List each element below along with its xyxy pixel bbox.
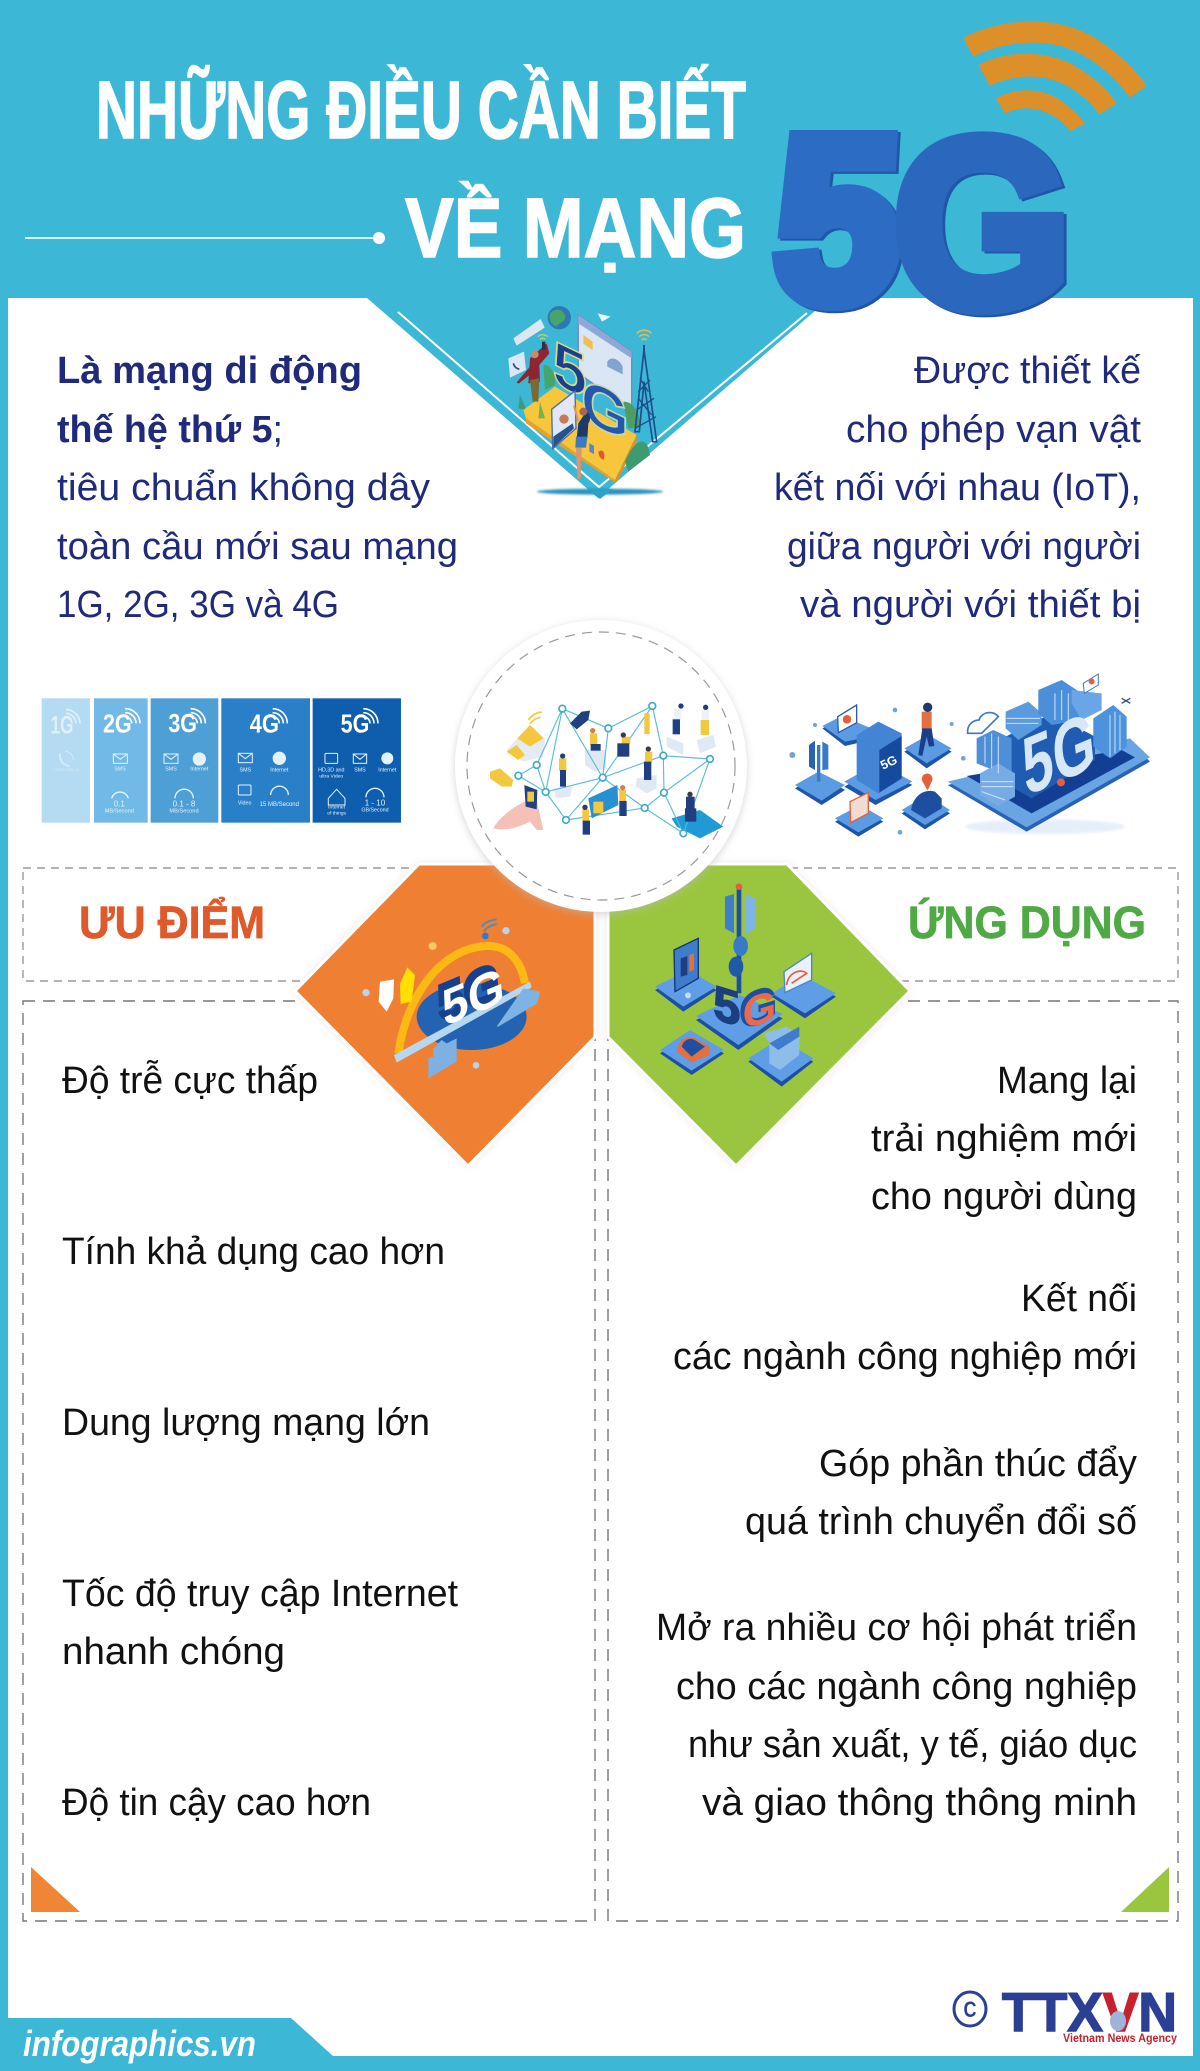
panel: 5G: SMS: [354, 768, 366, 774]
text block: 5G design purpose: giữa người với người: [787, 526, 1141, 568]
panel: orange diamond with 5G icon: [295, 864, 595, 1166]
panel: applications list box: [608, 1001, 1178, 1921]
panel: green diamond with devices icon: [608, 864, 910, 1166]
text block: 5G design purpose: kết nối với nhau (IoT),: [774, 467, 1141, 509]
heading: applications: ỨNG DỤNG: [908, 897, 1146, 948]
text block: applications list: cho người dùng: [871, 1176, 1137, 1218]
text block: applications list: và giao thông thông minh: [702, 1782, 1137, 1824]
panel: 3G: SMS: [165, 766, 177, 772]
panel: 5G: HD,3D and: [318, 768, 345, 774]
icon: isometric 5G city and devices: [789, 674, 1150, 837]
chart: mobile generations table: [42, 698, 401, 823]
text block: advantages list: Độ tin cậy cao hơn: [62, 1782, 371, 1824]
text block: 5G definition: [57, 350, 458, 626]
panel: 4G: [221, 698, 310, 823]
panel: 3G: Internet: [190, 766, 209, 772]
panel: 4G: 15 MB/Second: [260, 801, 299, 808]
title: [96, 65, 746, 275]
text block: 5G design purpose: Được thiết kế: [914, 350, 1141, 392]
panel: 2G: [94, 698, 148, 823]
icon: isometric devices: [655, 883, 836, 1087]
panel: 5G: GB/Second: [361, 807, 389, 813]
panel: 3G: MB/Second: [169, 809, 199, 815]
text block: advantages list: Dung lượng mạng lớn: [62, 1402, 430, 1444]
text block: applications list: trải nghiệm mới: [871, 1118, 1137, 1160]
panel: 5G: 1 - 10: [365, 799, 386, 808]
panel: 5G: of things: [327, 810, 347, 816]
title: VỀ MẠNG: [405, 181, 746, 275]
panel: 4G: 4G: [250, 709, 279, 739]
text block: advantages list: [62, 1059, 458, 1824]
V inner line: [398, 312, 807, 487]
panel: 5G: Internet: [328, 805, 346, 811]
icon: network of people: [490, 703, 723, 838]
panel: 4G: SMS: [240, 768, 252, 774]
text block: applications list: cho các ngành công nghiệp: [676, 1666, 1137, 1708]
title connector line: [25, 232, 385, 244]
icon: 5G arch: [362, 919, 540, 1078]
panel: applications header box: [608, 868, 1178, 981]
panel: 2G: 0.1: [114, 800, 125, 809]
panel: 1G: [42, 698, 90, 823]
panel: 5G: Internet: [378, 768, 397, 774]
icon: isometric devices: 5: [713, 975, 740, 1037]
panel: advantages list box: [23, 1001, 595, 1921]
panel: advantages header box: [23, 868, 595, 981]
copyright symbol: [954, 1992, 986, 2026]
panel: 5G: 5G: [341, 709, 369, 739]
panel: 2G: SMS: [114, 766, 126, 772]
text block: advantages list: Tốc độ truy cập Internet: [62, 1573, 458, 1615]
icon: big blue 3D 5G: [769, 89, 1074, 359]
panel: 2G: 2G: [103, 709, 132, 739]
text block: applications list: Kết nối: [1021, 1278, 1137, 1320]
panel: 3G: [151, 698, 218, 823]
text block: 5G definition: thế hệ thứ 5;: [57, 409, 283, 451]
logo: TTXVN: Vietnam News Agency: [1063, 2031, 1177, 2045]
text block: 5G definition: tiêu chuẩn không dây: [57, 467, 430, 509]
text block: applications list: [656, 1060, 1137, 1824]
text block: 5G definition: 1G, 2G, 3G và 4G: [57, 584, 339, 626]
text block: advantages list: nhanh chóng: [62, 1631, 285, 1673]
text block: advantages list: Độ trễ cực thấp: [62, 1059, 318, 1102]
icon: isometric 5G city and devices: 5G: [878, 753, 900, 773]
text block: applications list: Góp phần thúc đẩy: [819, 1443, 1137, 1485]
copyright symbol: C: [964, 1997, 977, 2022]
icon: 5G arch: 5G: [435, 952, 502, 1033]
text block: 5G design purpose: cho phép vạn vật: [846, 409, 1141, 451]
icon: orange wifi arcs: [963, 21, 1147, 131]
orange corner triangle: [31, 1867, 80, 1912]
text block: 5G definition: toàn cầu mới sau mạng: [57, 526, 458, 568]
heading: advantages: ƯU ĐIỂM: [79, 897, 265, 948]
panel: 1G: 1G: [51, 711, 73, 739]
panel: 5G: ultra Video: [319, 773, 343, 779]
text block: 5G design purpose: [774, 350, 1141, 626]
text block: applications list: Mang lại: [997, 1060, 1137, 1102]
icon: isometric devices: G: [739, 975, 777, 1040]
text block: applications list: các ngành công nghiệp mới: [673, 1336, 1137, 1378]
panel: 4G: Internet: [270, 768, 289, 774]
icon: 5G isometric illustration in V: G: [581, 363, 629, 455]
text block: applications list: Mở ra nhiều cơ hội phát triển: [656, 1607, 1137, 1649]
logo: TTXVN: TTXVN: [1002, 1981, 1177, 2043]
icon: 5G isometric illustration in V: 5: [553, 326, 587, 412]
text block: advantages list: Tính khả dụng cao hơn: [62, 1231, 445, 1273]
icon: big blue 3D 5G: G: [893, 89, 1071, 357]
center circle with network illustration: [455, 620, 747, 914]
icon: big blue 3D 5G: G: [896, 91, 1074, 359]
panel: 3G: 3G: [168, 708, 197, 738]
footer site name: infographics.vn: [23, 2023, 256, 2064]
icon: isometric devices: G: [743, 981, 776, 1039]
title: NHỮNG ĐIỀU CẦN BIẾT: [96, 65, 746, 156]
icon: 5G arch: 5G: [440, 957, 507, 1038]
text block: applications list: quá trình chuyển đổi số: [745, 1501, 1137, 1543]
icon: 5G isometric illustration in V: [508, 306, 663, 499]
text block: 5G design purpose: và người với thiết bị: [800, 584, 1141, 626]
panel: 2G: MB/Second: [105, 809, 134, 815]
text block: applications list: như sản xuất, y tế, giáo dục: [688, 1724, 1137, 1766]
panel: 3G: 0.1 - 8: [173, 800, 196, 809]
text block: 5G definition: Là mạng di động: [57, 350, 362, 392]
green corner triangle: [1121, 1867, 1169, 1912]
panel: 4G: Video: [238, 801, 251, 807]
icon: isometric 5G city and devices: 5G: [1018, 693, 1099, 813]
panel: 5G: [313, 698, 401, 823]
icon: big blue 3D 5G: 5: [769, 89, 907, 350]
panel: 1G: VOICE CALLS: [53, 767, 79, 772]
icon: big blue 3D 5G: 5: [772, 91, 909, 352]
